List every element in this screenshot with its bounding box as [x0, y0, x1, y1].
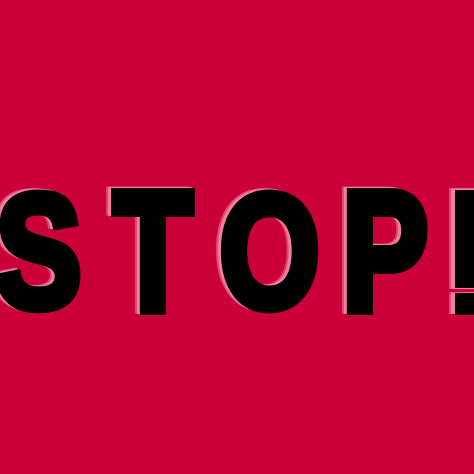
letter P: P [337, 154, 423, 345]
letter O: O [219, 161, 320, 341]
letter T: T [108, 154, 187, 345]
letter T: T [114, 156, 192, 346]
letter T: T [110, 155, 189, 345]
letter P: P [342, 156, 428, 346]
letter O: O [216, 160, 317, 340]
letter P: P [339, 155, 425, 345]
letter O: O [214, 160, 315, 340]
title: STOP! [0, 154, 474, 348]
